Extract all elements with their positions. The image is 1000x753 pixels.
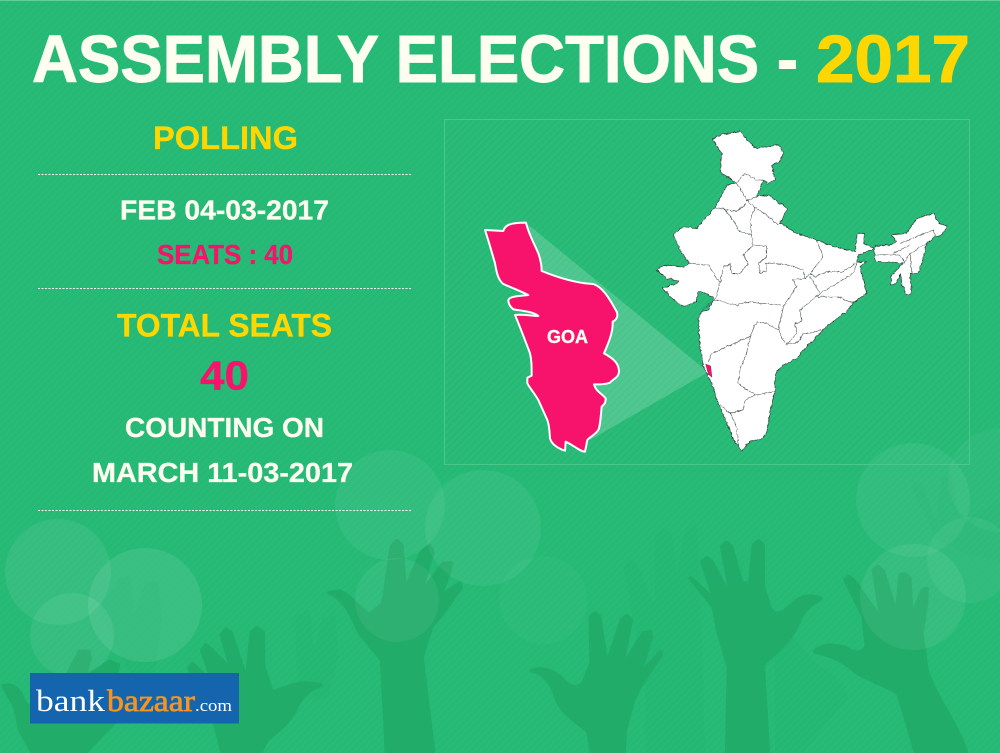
background faint hands [100,477,1000,753]
background bokeh circles [5,428,1000,677]
logo: bankbazaar: bank [36,683,106,718]
logo: bankbazaar: .com [195,696,232,715]
hand: lower centre [532,613,661,751]
title: ASSEMBLY ELECTIONS - [32,22,798,97]
polling date: FEB 04-03-2017 [120,194,329,226]
map panel [444,120,970,464]
hand: centre-left large [329,541,461,751]
title: 2017 [816,22,970,97]
hand: left centre [189,628,321,751]
counting date: MARCH 11-03-2017 [92,457,353,488]
spotlight beam [525,222,708,440]
enlarged Goa shape [485,223,619,452]
polling seats: SEATS : 40 [157,239,293,270]
counting label: COUNTING ON [125,412,324,443]
logo: bankbazaar: bazaar [107,683,196,718]
Goa highlight on map [706,364,712,377]
total seats number: 40 [200,352,249,398]
hand: centre large [691,541,821,751]
logo: bankbazaar [30,673,239,724]
India outline [657,131,947,451]
totals info panel [38,308,412,510]
polling heading: POLLING [153,120,298,156]
Goa label: GOA [547,327,588,347]
total seats heading: TOTAL SEATS [117,308,332,344]
polling info panel [38,120,412,288]
map of India [657,131,947,451]
hand: far left [3,652,118,751]
state borders [690,173,935,448]
hand: right [815,567,966,751]
